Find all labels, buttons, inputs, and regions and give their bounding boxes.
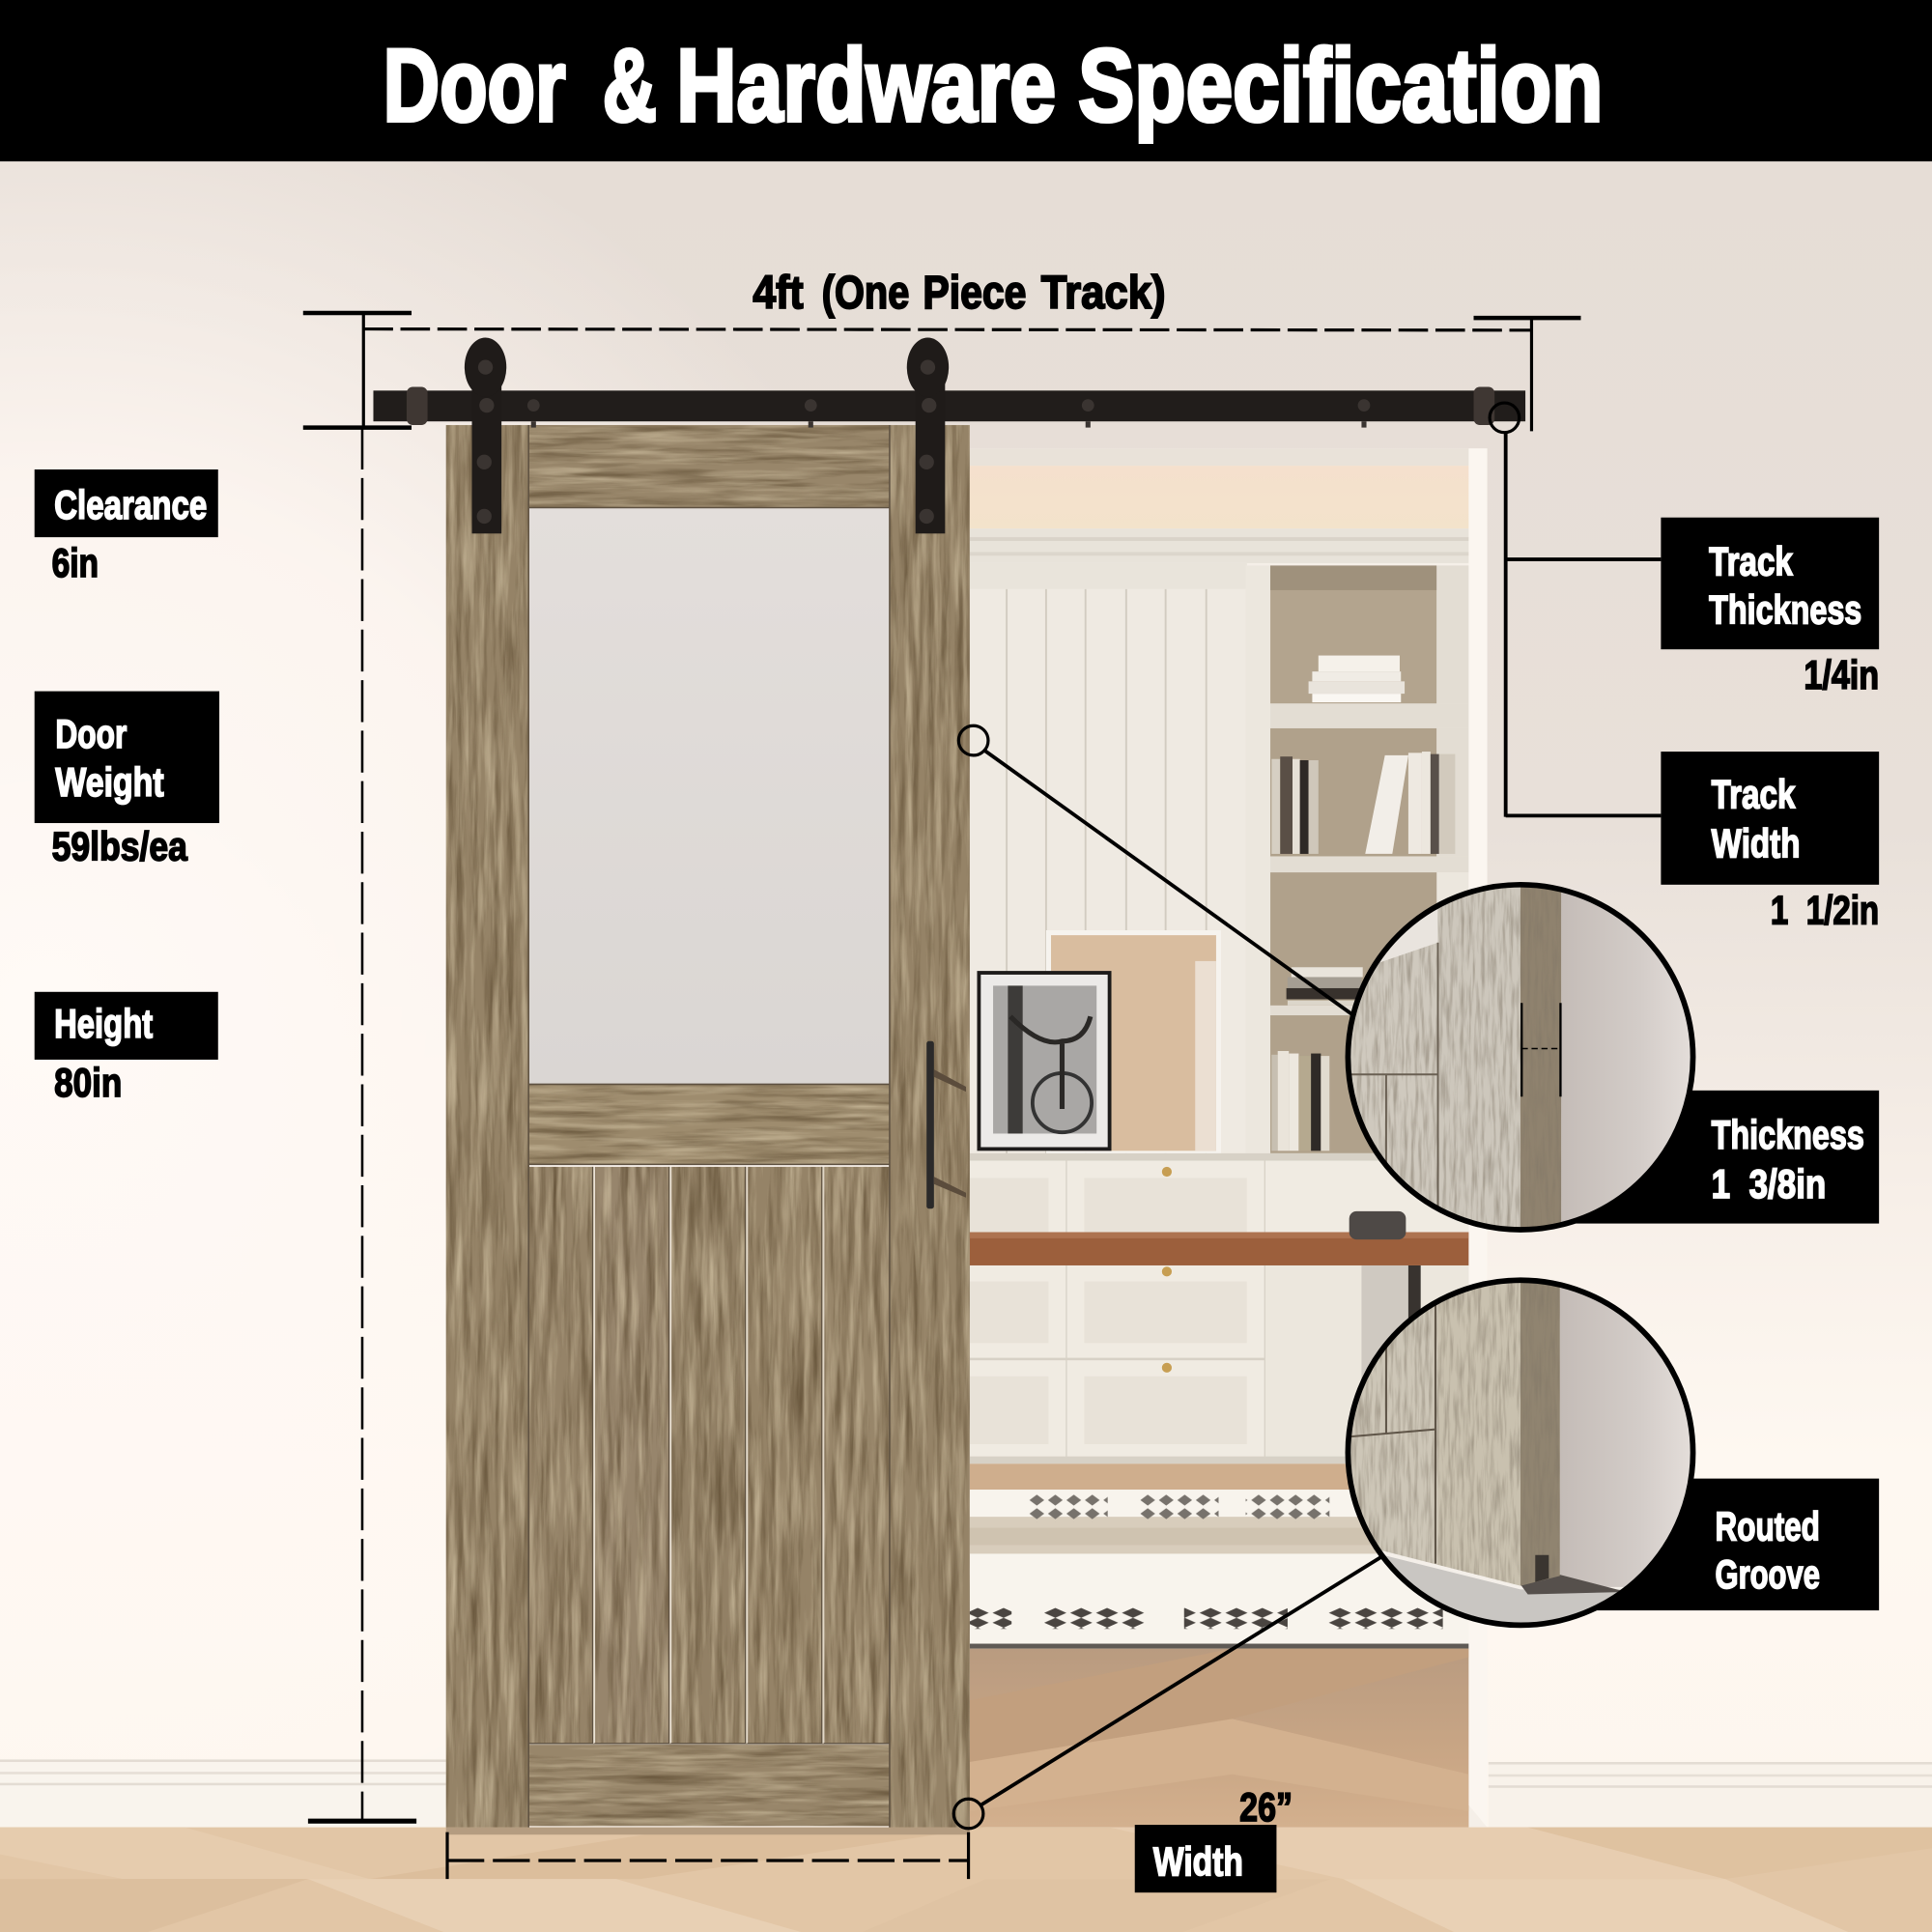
title: Hardware [676,27,1056,143]
door frame stiles [446,425,970,1828]
title: Specification [1078,27,1603,143]
top rail [528,425,890,508]
value: 26 inches: 26” [1239,1784,1293,1830]
label: Clearance [35,469,218,537]
track length label [753,267,1166,319]
title: & [603,27,657,143]
label: Track Thickness: Track [1709,539,1793,584]
sliding door [446,425,970,1828]
label: Door Weight: Door [55,711,127,756]
width dimension line [447,1833,969,1879]
value: 80in: 80in [54,1060,122,1105]
track callout leader [1490,403,1661,817]
label: Height [35,992,218,1060]
track length label: (One [822,267,909,319]
label: Clearance: Clearance [54,482,207,527]
planks [528,1167,890,1744]
door casing [1468,448,1488,1828]
label: Track Thickness [1661,518,1879,649]
value: 1/4in: 1/4in [1804,652,1879,697]
track length label: 4ft [753,267,804,319]
rug and inner floor [970,1463,1468,1828]
thickness marker [1521,1003,1560,1096]
thickness leader [958,725,1351,1014]
height dimension line [308,428,416,1821]
track length label: Piece [923,267,1026,319]
label: Width [1135,1825,1276,1892]
door handle [926,1041,966,1208]
label: Track Width: Track [1712,772,1796,817]
value: 59lbs/ea: 59lbs/ea [52,823,187,868]
floor [0,1828,1932,1932]
value: 6in: 6in [52,540,99,585]
label: Routed Groove [1589,1479,1879,1610]
bookshelf [1246,565,1468,1154]
art prints [977,930,1221,1153]
track length label: Track) [1041,267,1166,319]
track length dimension [303,313,1580,431]
desk and cup [970,1211,1468,1265]
track rail [373,390,1525,421]
beadboard panel [970,563,1247,1158]
track stoppers [407,387,1494,425]
label: Thickness: Thickness [1712,1112,1864,1157]
label: Width: Width [1153,1838,1243,1884]
label: Thickness: 1 3/8in [1712,1161,1826,1207]
detail circle: routed groove [1348,1279,1693,1625]
baseboards [0,1759,1932,1828]
groove leader [953,1556,1382,1829]
label: Routed Groove: Groove [1716,1551,1820,1597]
title [384,27,1603,143]
label: Track Width: Width [1712,821,1801,867]
barn door track and hardware [373,337,1525,533]
label: Door Weight [35,692,219,823]
label: Track Thickness: Thickness [1709,586,1861,632]
cabinets [970,1153,1468,1463]
bottom rail [528,1745,890,1826]
left hanger [465,337,506,533]
joints [528,425,890,1828]
title bar [0,0,1932,161]
lock rail [528,1084,890,1164]
glass panel [528,508,890,1084]
detail circle: door thickness [1348,885,1693,1231]
label: Height: Height [54,1001,153,1046]
doorway view into the room [970,448,1488,1828]
track bolts [527,399,1370,428]
label: Thickness [1571,1091,1879,1224]
label: Track Width [1661,752,1879,885]
right hanger [907,337,949,533]
title: Door [384,27,565,143]
label: Routed Groove: Routed [1716,1503,1820,1548]
label: Door Weight: Weight [55,759,164,805]
books [1271,656,1455,1151]
value: 1 1/2in: 1 1/2in [1771,888,1879,933]
